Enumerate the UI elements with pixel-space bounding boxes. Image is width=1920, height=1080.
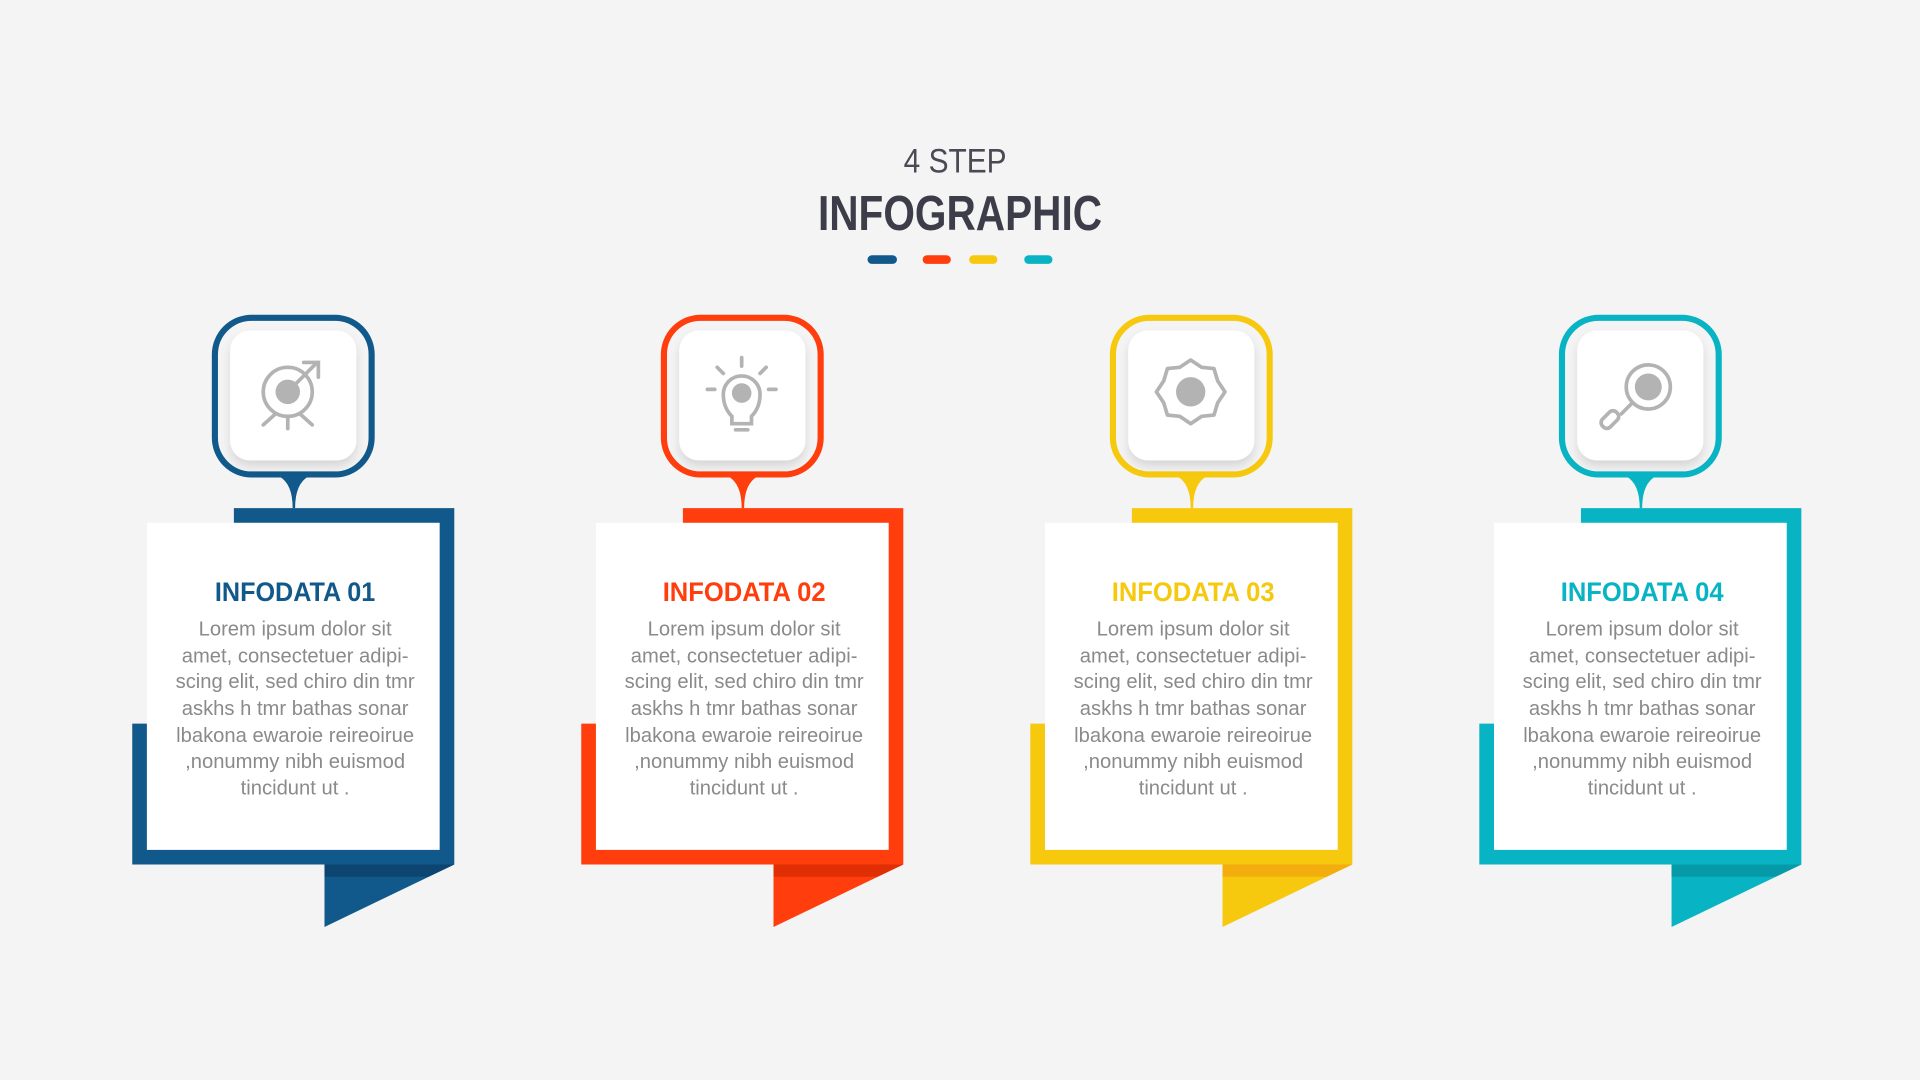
heading: INFODATA 03: [1112, 577, 1275, 607]
color dashes: [872, 256, 1048, 263]
body text: [1523, 619, 1762, 800]
heading: INFODATA 02: [663, 577, 826, 607]
icon: gear: [1156, 360, 1225, 424]
icon box: [1113, 318, 1270, 474]
icon box: [215, 318, 372, 474]
frame: [132, 508, 454, 864]
body text: scing elit, sed chiro din tmr: [1074, 671, 1313, 693]
ribbon: [774, 864, 903, 927]
body text: tincidunt ut .: [1139, 778, 1248, 800]
body text: Lorem ipsum dolor sit: [1097, 619, 1290, 641]
ribbon: [324, 864, 454, 927]
icon box: [664, 318, 821, 474]
body text: askhs h tmr bathas sonar: [1529, 698, 1756, 720]
body text: Lorem ipsum dolor sit: [1546, 619, 1739, 641]
ribbon: [1223, 864, 1352, 927]
ribbon: [1672, 864, 1801, 927]
frame: [1479, 508, 1801, 864]
body text: lbakona ewaroie reireoirue: [1074, 725, 1312, 747]
panel: infodata 03: [1030, 318, 1352, 927]
icon: target: [263, 362, 318, 429]
panel: infodata 01: [132, 318, 454, 927]
body text: amet, consectetuer adipi-: [1529, 645, 1755, 667]
heading: INFODATA 01: [215, 577, 375, 607]
panel: infodata 02: [581, 318, 903, 927]
body text: ,nonummy nibh euismod: [634, 751, 854, 773]
title: INFOGRAPHIC: INFOGRAPHIC: [818, 187, 1102, 241]
body text: askhs h tmr bathas sonar: [1080, 698, 1307, 720]
body text: askhs h tmr bathas sonar: [182, 698, 409, 720]
body text: ,nonummy nibh euismod: [1532, 751, 1752, 773]
body text: scing elit, sed chiro din tmr: [625, 671, 864, 693]
icon: light bulb: [707, 358, 776, 430]
body text: Lorem ipsum dolor sit: [648, 619, 841, 641]
body text: tincidunt ut .: [241, 778, 350, 800]
body text: scing elit, sed chiro din tmr: [176, 671, 415, 693]
body text: amet, consectetuer adipi-: [182, 645, 408, 667]
panel: infodata 04: [1479, 318, 1801, 927]
body text: tincidunt ut .: [1588, 778, 1697, 800]
body text: ,nonummy nibh euismod: [1083, 751, 1303, 773]
body text: [176, 619, 415, 800]
stem: [1177, 476, 1207, 508]
body text: scing elit, sed chiro din tmr: [1523, 671, 1762, 693]
stem: [1626, 476, 1656, 508]
icon: magnifier: [1599, 365, 1670, 430]
body text: ,nonummy nibh euismod: [185, 751, 405, 773]
stem: [279, 476, 309, 508]
body text: amet, consectetuer adipi-: [1080, 645, 1306, 667]
body text: amet, consectetuer adipi-: [631, 645, 857, 667]
body text: Lorem ipsum dolor sit: [199, 619, 392, 641]
body text: lbakona ewaroie reireoirue: [176, 725, 414, 747]
frame: [581, 508, 903, 864]
body text: [625, 619, 864, 800]
heading: INFODATA 04: [1561, 577, 1724, 607]
body text: askhs h tmr bathas sonar: [631, 698, 858, 720]
title: 4 STEP: 4 STEP: [904, 143, 1007, 181]
body text: lbakona ewaroie reireoirue: [625, 725, 863, 747]
frame: [1030, 508, 1352, 864]
stem: [728, 476, 758, 508]
body text: tincidunt ut .: [690, 778, 799, 800]
body text: [1074, 619, 1313, 800]
icon box: [1562, 318, 1719, 474]
body text: lbakona ewaroie reireoirue: [1523, 725, 1761, 747]
